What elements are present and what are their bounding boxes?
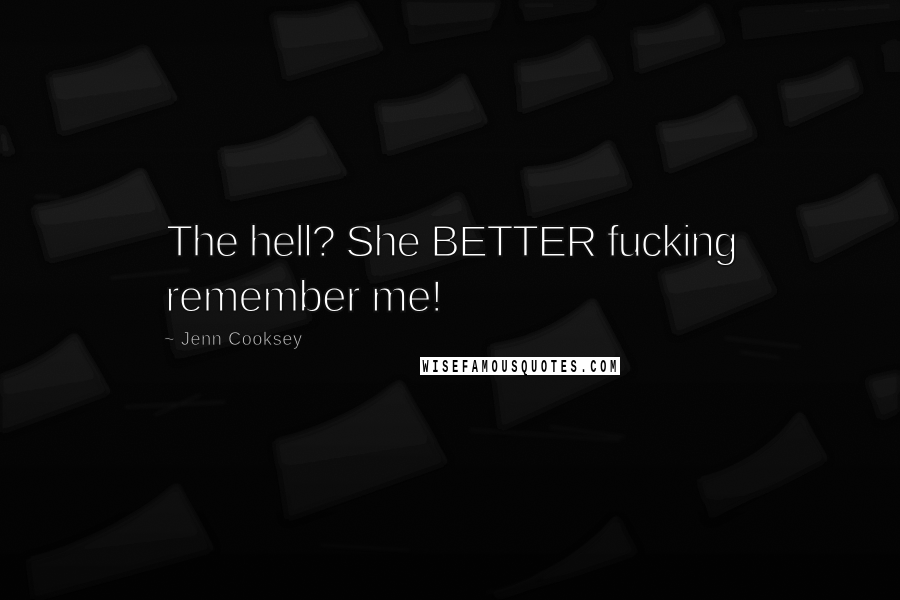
quote text: remember me! (165, 272, 443, 322)
source badge: WISEFAMOUSQUOTES.COM (422, 358, 616, 378)
quote text (165, 218, 738, 322)
attribution: ~ Jenn Cooksey (164, 329, 302, 349)
quote text: The hell? She BETTER fucking (166, 218, 738, 266)
